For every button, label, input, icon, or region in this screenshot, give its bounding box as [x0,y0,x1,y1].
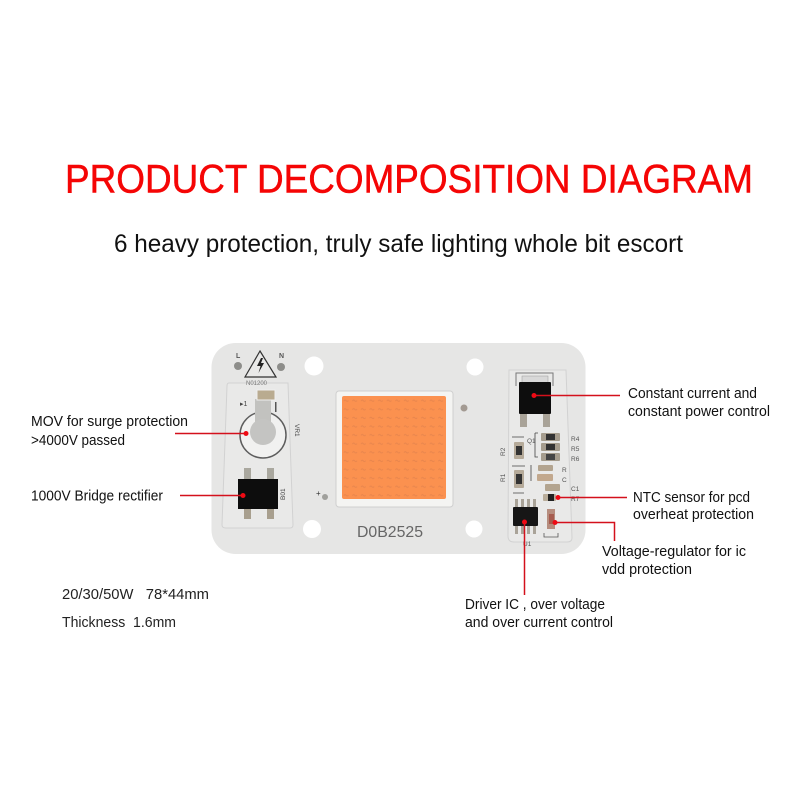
component: SMD parts group: R4 [571,436,580,443]
icon: high voltage warning triangle: N [279,353,284,360]
icon: high voltage warning triangle [234,351,285,387]
board base [212,343,586,554]
polarity marker [316,489,328,500]
callout: voltage regulator [552,520,746,578]
callout: constant current control [532,386,770,420]
component: SMD parts group: R6 [571,456,580,463]
callout: MOV surge protection: MOV for surge protection [31,414,188,430]
board model label: D0B2525 [357,524,423,541]
component: SMD parts group: R2 [500,447,507,456]
subtitle: 6 heavy protection, truly safe lighting whole bit escort [114,230,683,258]
callout: voltage regulator: Voltage-regulator for ic [602,544,746,560]
icon: high voltage warning triangle: L [236,353,241,360]
mounting holes [303,356,484,538]
title: PRODUCT DECOMPOSITION DIAGRAM [65,158,753,202]
panel: LED driver board [212,343,586,554]
component: MOSFET constant current [516,373,553,427]
component: MOV varistor: ▸1 [240,401,248,408]
callout: bridge rectifier: 1000V Bridge rectifier [31,488,163,504]
component: driver IC: U1 [523,541,532,548]
icon: high voltage warning triangle: N01200 [246,381,268,387]
callout: NTC sensor [556,490,754,523]
component: MOV varistor [240,390,300,458]
component: SMD parts group: R5 [571,446,580,453]
component: voltage regulator diode [544,509,558,537]
right component outline [508,370,572,542]
component: bridge rectifier [238,468,287,519]
component: SMD parts group: R [562,467,567,474]
callout: MOV surge protection [31,414,248,449]
callout: driver IC [465,520,613,631]
spec: thickness: Thickness 1.6mm [62,615,176,631]
callout: voltage regulator: vdd protection [602,562,692,578]
component: COB LED chip [336,391,453,507]
callout: MOV surge protection: >4000V passed [31,433,125,449]
component: SMD parts group: Q1 [527,438,536,445]
callout: bridge rectifier [31,488,246,504]
callout: constant current control: constant power control [628,404,770,420]
left component outline [222,383,293,528]
component: driver IC [513,499,538,548]
callout: NTC sensor: NTC sensor for pcd [633,490,750,506]
component: SMD parts group: C [562,477,567,484]
component: SMD parts group: R1 [500,473,507,482]
callout: driver IC: and over current control [465,615,613,631]
polarity marker: + [316,489,321,498]
component: bridge rectifier: B01 [280,488,287,500]
component: SMD parts group: C1 [571,486,580,493]
test point [460,404,468,412]
component: MOV varistor: VR1 [293,424,300,437]
component: SMD parts group: R7 [571,496,580,503]
component: SMD parts group [500,433,580,503]
callout: NTC sensor: overheat protection [633,507,754,523]
callout: driver IC: Driver IC , over voltage [465,597,605,613]
callout: constant current control: Constant current and [628,386,757,402]
spec: wattage and size: 20/30/50W 78*44mm [62,587,209,603]
